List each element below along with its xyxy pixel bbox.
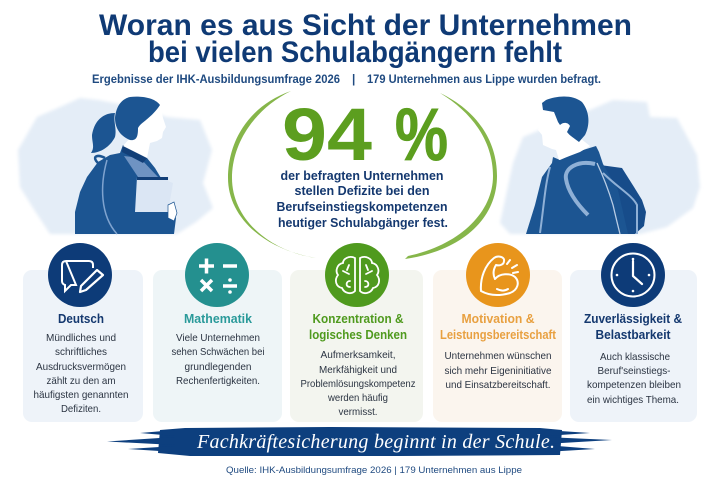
statistic description: stellen Defizite bei den <box>294 183 430 198</box>
icon: brain <box>325 243 389 307</box>
body text: zählt zu den am <box>46 376 116 387</box>
subtitle <box>92 72 601 86</box>
statistic description: heutiger Schulabgänger fest. <box>278 215 448 230</box>
heading: Konzentration & <box>312 311 404 326</box>
body text: vermisst. <box>338 407 378 418</box>
subtitle: | <box>352 72 355 86</box>
title <box>99 9 632 69</box>
statistic description: Berufseinstiegskompetenzen <box>276 199 448 214</box>
heading: Deutsch <box>58 311 104 326</box>
body text: kompetenzen bleiben <box>587 380 681 391</box>
heading: logisches Denken <box>309 327 407 342</box>
94 %: % <box>395 93 448 176</box>
body text: Auch klassische <box>600 352 670 363</box>
body text: ein wichtiges Thema. <box>587 395 679 406</box>
panel: Deutsch <box>23 243 143 422</box>
icon: arithmetic symbols <box>185 243 249 307</box>
heading <box>584 311 682 342</box>
94 % <box>282 93 448 176</box>
heading: Belastbarkeit <box>596 327 671 342</box>
body text <box>172 333 264 387</box>
hand <box>168 202 177 221</box>
brush wash behind student <box>500 100 700 234</box>
body text: grundlegenden <box>184 362 252 373</box>
icon: clock <box>601 243 665 307</box>
book <box>135 177 173 212</box>
green brush ring <box>228 91 497 259</box>
panel: Konzentration <box>290 243 423 422</box>
body text: Unternehmen wünschen <box>444 351 552 362</box>
hoodie body <box>526 146 628 234</box>
heading <box>440 311 557 342</box>
hair and ponytail <box>115 97 160 140</box>
statistic description: der befragten Unternehmen <box>280 168 444 183</box>
ear <box>562 124 568 134</box>
body text: Rechenfertigkeiten. <box>176 376 260 387</box>
body text: sehen Schwächen bei <box>172 347 264 358</box>
body text: Beruf'seinstiegs- <box>598 366 670 377</box>
body text: sich mehr Eigeninitiative <box>444 366 552 377</box>
title: bei vielen Schulabgängern fehlt <box>148 36 562 69</box>
subtitle: Ergebnisse der IHK-Ausbildungsumfrage 2026 <box>92 72 340 86</box>
face and neck <box>123 104 166 158</box>
title: Woran es aus Sicht der Unternehmen <box>99 9 632 42</box>
heading: Mathematik <box>184 311 253 326</box>
body text: Merkfähigkeit und <box>319 365 397 376</box>
icon: flexed arm <box>466 243 530 307</box>
body text: schriftliches <box>55 347 107 358</box>
brush wash behind student <box>18 98 213 234</box>
heading: Leistungsbereitschaft <box>440 327 557 342</box>
heading <box>309 311 407 342</box>
subtitle: 179 Unternehmen aus Lippe wurden befragt. <box>367 72 601 86</box>
body text: Viele Unternehmen <box>176 333 260 344</box>
94 %: 94 <box>282 93 372 176</box>
heading: Motivation & <box>462 311 534 326</box>
statistic description <box>276 168 448 230</box>
icon: speech bubble and pencil <box>48 243 112 307</box>
heading: Zuverlässigkeit & <box>584 311 682 326</box>
body text: Aufmerksamkeit, <box>320 350 396 361</box>
body text <box>34 333 128 415</box>
body text: Defiziten. <box>61 404 101 415</box>
panel: Mathematik <box>153 243 282 422</box>
illustration: student with hoodie and backpack <box>500 96 700 234</box>
body text <box>444 351 552 391</box>
hair <box>542 96 588 142</box>
body text: werden häufig <box>327 393 388 404</box>
figure body and backpack <box>75 145 176 234</box>
source note: Quelle: IHK-Ausbildungsumfrage 2026 | 179 Unternehmen aus Lippe <box>226 465 522 476</box>
banner: closing message <box>107 427 612 456</box>
body text: und Einsatzbereitschaft. <box>446 380 550 391</box>
body text: Mündliches und <box>46 333 116 344</box>
backpack straps <box>540 167 550 233</box>
face and neck <box>538 108 590 160</box>
panel: Zuverlässigkeit <box>570 243 697 422</box>
banner: closing message: Fachkräftesicherung beginnt in der Schule. <box>196 431 555 453</box>
panel: Motivation <box>433 243 562 422</box>
body text <box>587 352 681 406</box>
backpack <box>590 165 646 234</box>
illustration: student with ponytail and book <box>18 97 213 234</box>
body text <box>300 350 416 418</box>
body text: häufigsten genannten <box>34 390 128 401</box>
body text: Ausdrucksvermögen <box>36 362 126 373</box>
central statistic <box>228 91 497 259</box>
body text: Problemlösungskompetenz <box>300 379 416 390</box>
